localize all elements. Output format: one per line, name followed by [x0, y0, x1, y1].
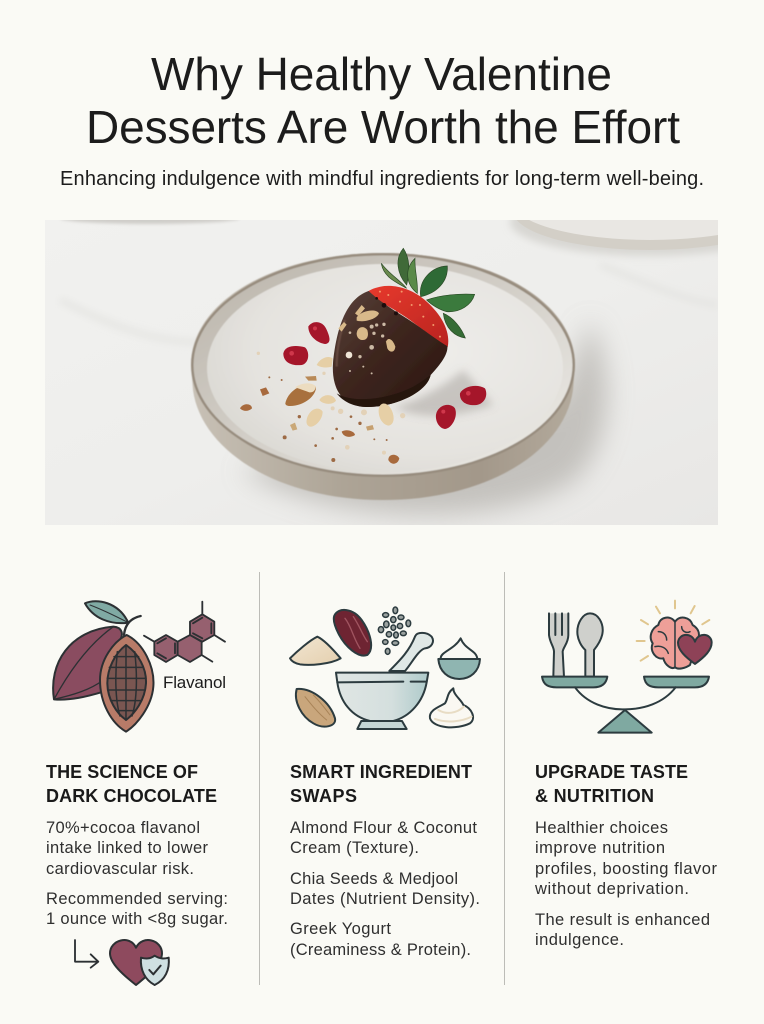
text block: almond flour: Almond Flour & Coconut: [290, 819, 477, 837]
flour pile: [290, 637, 341, 665]
text block: healthier choices: Healthier choices: [535, 819, 668, 837]
heading: SMART INGREDIENT: [290, 762, 472, 782]
leaves: [381, 248, 475, 338]
title: Desserts Are Worth the Effort: [86, 101, 680, 153]
text block: chia seeds: Dates (Nutrient Density).: [290, 890, 480, 908]
heading: [535, 762, 688, 806]
heading: THE SCIENCE OF: [46, 762, 198, 782]
text block: almond flour: Cream (Texture).: [290, 839, 419, 857]
pomegranate seeds: [283, 322, 486, 429]
plate in the background: [509, 220, 718, 258]
berry top: [365, 286, 448, 347]
almonds and crumbs: [285, 385, 316, 406]
brain: [651, 618, 699, 669]
text block: result: indulgence.: [535, 931, 624, 949]
yogurt bowl: [441, 638, 477, 659]
mortar: [336, 673, 428, 721]
text block: flavanol intake: [46, 819, 208, 878]
icon: balance scale with cutlery, brain and heart: [542, 601, 712, 733]
heart: [678, 635, 712, 664]
base: [598, 710, 652, 733]
beam: [575, 687, 676, 709]
heading: SWAPS: [290, 786, 357, 806]
column divider: [258, 572, 260, 985]
text block: chia seeds: Chia Seeds & Medjool: [290, 870, 458, 888]
heading: [46, 762, 217, 806]
heading: DARK CHOCOLATE: [46, 786, 217, 806]
text block: almond flour: [290, 819, 477, 857]
chia seeds: [378, 607, 411, 654]
text block: flavanol intake: cardiovascular risk.: [46, 860, 194, 878]
text block: serving: 1 ounce with <8g sugar.: [46, 910, 228, 928]
arrow: [75, 940, 98, 968]
pans: [542, 677, 607, 687]
text block: healthier choices: [534, 819, 718, 898]
chocolate: [333, 291, 447, 407]
text block: healthier choices: profiles, boosting flavor: [535, 860, 718, 878]
pestle: [389, 633, 433, 671]
subtitle: Enhancing indulgence with mindful ingredients for long-term well-being.: [60, 168, 704, 190]
strawberry and toppings: [240, 248, 493, 464]
panel: science of dark chocolate: [46, 601, 228, 985]
text block: chia seeds: [290, 870, 480, 908]
text block: greek yogurt: (Creaminess & Protein).: [290, 941, 471, 959]
text block: greek yogurt: Greek Yogurt: [290, 920, 391, 938]
heading: [290, 762, 472, 806]
plate shadow: [240, 320, 607, 515]
fork: [549, 613, 568, 677]
text block: flavanol intake: intake linked to lower: [46, 839, 208, 857]
text block: result: [535, 911, 710, 949]
icon: flavanol molecule: [144, 602, 225, 662]
text block: serving: Recommended serving:: [46, 890, 228, 908]
hero photo: chocolate strawberry on a plate: [45, 220, 718, 525]
icon: heart with shield: [110, 940, 169, 985]
title: [86, 48, 680, 153]
date: [334, 610, 371, 656]
icon: mortar, pestle and ingredients: [290, 607, 480, 729]
panel: upgrade taste and nutrition: [534, 601, 718, 949]
cream swirl: [430, 688, 473, 727]
heading: UPGRADE TASTE: [535, 762, 688, 782]
title: Why Healthy Valentine: [151, 48, 612, 100]
text block: flavanol intake: 70%+cocoa flavanol: [46, 819, 200, 837]
text block: serving: [46, 890, 228, 928]
panel: smart ingredient swaps: [290, 607, 480, 959]
text block: greek yogurt: [290, 920, 471, 959]
text block: healthier choices: improve nutrition: [535, 839, 665, 857]
text block: result: The result is enhanced: [535, 911, 710, 929]
column divider: [504, 572, 506, 985]
nuts on the berry: [338, 305, 395, 358]
icon: cocoa pod with leaf: [53, 601, 153, 732]
spoon: [577, 613, 603, 677]
plate: [191, 253, 575, 500]
text block: healthier choices: without deprivation.: [534, 880, 689, 898]
label: Flavanol: Flavanol: [163, 673, 226, 692]
sparkles: [637, 601, 709, 661]
heading: & NUTRITION: [535, 786, 654, 806]
almond: [296, 689, 335, 727]
